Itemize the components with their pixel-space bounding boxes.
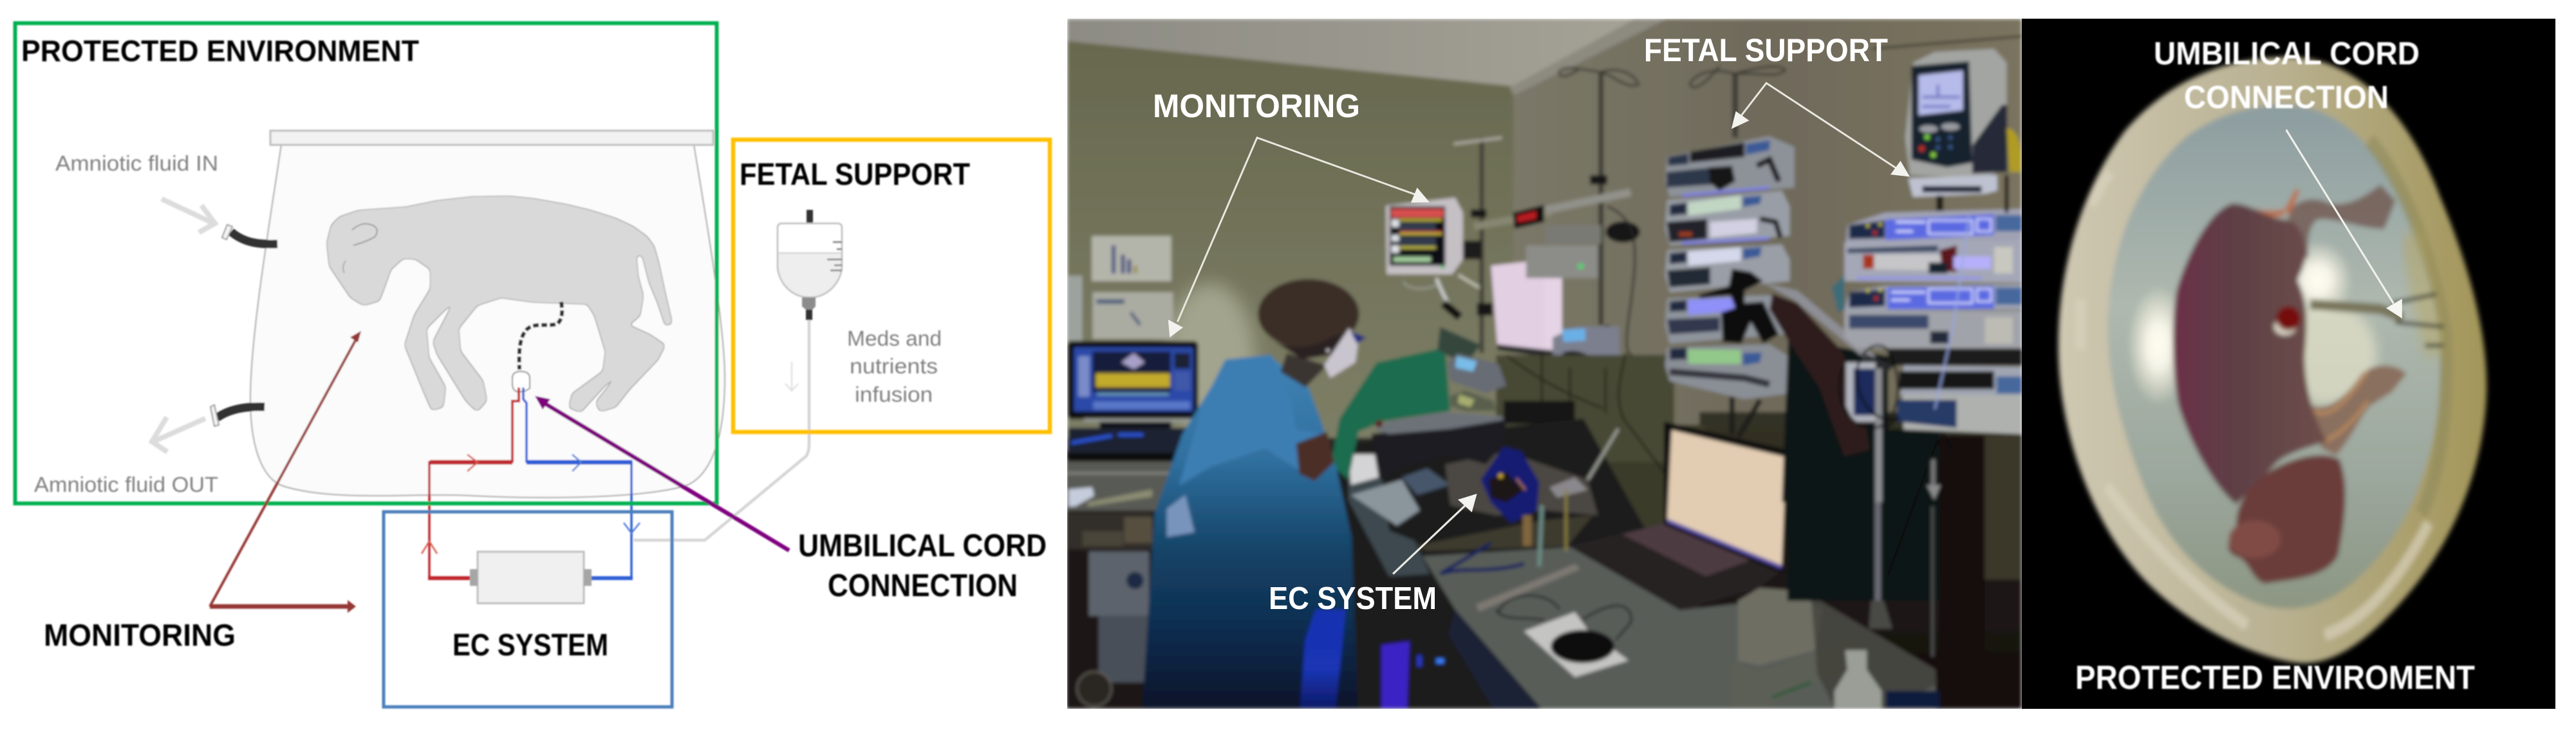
person in blue gown: [1142, 355, 1358, 709]
pump unit 5: [1665, 344, 1788, 399]
green scrub person: [1330, 327, 1481, 480]
black background: [2022, 19, 2555, 709]
amniotic tank: [250, 131, 725, 498]
text: meds and nutrients: nutrients: [850, 354, 938, 378]
right side rail: [2369, 140, 2446, 514]
label: EC system: EC SYSTEM: [453, 628, 608, 662]
pump unit 1: [1665, 136, 1795, 197]
glow 3: [2281, 303, 2377, 406]
desk and equipment table: [1281, 418, 1936, 709]
label: amniotic fluid in: Amniotic fluid IN: [55, 151, 218, 175]
infusion line to circuit: [633, 320, 809, 540]
bag rim: [2058, 57, 2487, 663]
panel: fetus in biobag photo: [2022, 19, 2555, 709]
arrows: fetal support: [1731, 83, 1910, 176]
red dot: [2276, 306, 2301, 330]
umbilical cord: [2310, 305, 2403, 317]
arrows: monitoring: [1168, 138, 1430, 337]
pump unit 3: [1665, 245, 1789, 292]
lower body and head: [2228, 455, 2346, 583]
cord connector: [2392, 294, 2443, 346]
panel: protected environment border: [15, 23, 717, 503]
heading: protected environment: PROTECTED ENVIRONMENT: [21, 34, 419, 68]
label: monitoring: MONITORING: [1153, 88, 1360, 124]
purple glow under desk: [1381, 641, 1444, 708]
rim highlights: [2080, 173, 2429, 635]
hind limb highlights: [2314, 371, 2367, 441]
panel: NICU photo: [1067, 19, 2022, 709]
laptop: [1570, 422, 1791, 610]
oxygenator: [470, 552, 592, 603]
arrow: umbilical connection: [535, 396, 789, 550]
gown leg: [1300, 610, 1346, 708]
annotations on photo: [1153, 32, 1910, 616]
label: umbilical cord connection: CONNECTION: [828, 568, 1018, 603]
IV poles and hardware center: [1526, 66, 1785, 450]
label: monitoring: MONITORING: [44, 619, 236, 653]
mouse and paper: [1496, 596, 1631, 677]
glows: [2127, 285, 2190, 406]
umbilical cord: [512, 302, 562, 391]
label: fetal support: FETAL SUPPORT: [1644, 32, 1888, 68]
arrow: EC system: [1393, 494, 1477, 574]
box and bottle: [1731, 588, 1939, 708]
panel: EC system: [384, 512, 672, 707]
head highlight: [2229, 521, 2281, 558]
equipment clutter: [1345, 444, 1607, 579]
circuit: blue line: [523, 388, 640, 578]
pump unit 4: [1665, 296, 1785, 344]
label: protected environment: PROTECTED ENVIROMENT: [2075, 659, 2475, 697]
label: umbilical cord connection: CONNECTION: [2184, 79, 2389, 115]
outlet tube and arrow: [152, 405, 265, 452]
text: meds and nutrients: infusion: [855, 382, 933, 406]
glow 2: [2282, 240, 2353, 320]
arrows: monitoring: [210, 331, 361, 613]
arrow: umbilical cord connection: [2286, 130, 2402, 319]
left monitor (ultrasound): [1068, 341, 1198, 462]
body: [2173, 203, 2327, 504]
icon: infusion bag: [778, 210, 842, 320]
IV poles and hardware left: [1443, 138, 1562, 359]
label: EC system: EC SYSTEM: [1269, 581, 1437, 616]
right pump stack: [1832, 209, 2022, 502]
biobag with fetus: [2058, 57, 2487, 663]
room background: [1067, 19, 2022, 709]
panel: fetal support: [733, 140, 1050, 432]
panel: schematic diagram: [15, 23, 1056, 707]
lamb fetus illustration: [327, 196, 672, 412]
posters: [1067, 236, 1173, 341]
inlet tube and arrow: [162, 199, 277, 244]
wall monitor: [1386, 198, 1482, 315]
clamp in hand: [1698, 268, 1779, 344]
yellow connector band: [2410, 234, 2436, 355]
cables and lower wall: [1496, 350, 1674, 480]
lower left cart: [1067, 451, 1178, 708]
pole, IV drip and arm lower right: [1787, 386, 2022, 708]
head of person: [1258, 279, 1367, 388]
incubator bin: [1371, 412, 1506, 480]
scrub arm: [1763, 283, 1894, 502]
label: amniotic fluid out: Amniotic fluid OUT: [34, 473, 218, 496]
bag interior: [2108, 105, 2441, 608]
small pumps center: [1448, 353, 1506, 411]
pump stack left: [1665, 36, 2022, 502]
top right pump: [1872, 36, 2022, 212]
front limbs: [2288, 184, 2395, 261]
heading: fetal support: FETAL SUPPORT: [740, 158, 970, 192]
pump unit 2: [1665, 191, 1789, 245]
text: meds and nutrients: Meds and: [847, 326, 942, 350]
arrow: flow direction: [785, 362, 798, 391]
red dot marker: [2274, 319, 2296, 335]
orange limb rim: [2238, 189, 2300, 217]
circuit: red line: [422, 388, 519, 578]
hind limbs: [2306, 366, 2407, 455]
label: umbilical cord connection: UMBILICAL CORD: [2154, 35, 2420, 71]
label: umbilical cord connection: UMBILICAL CORD: [798, 529, 1047, 563]
